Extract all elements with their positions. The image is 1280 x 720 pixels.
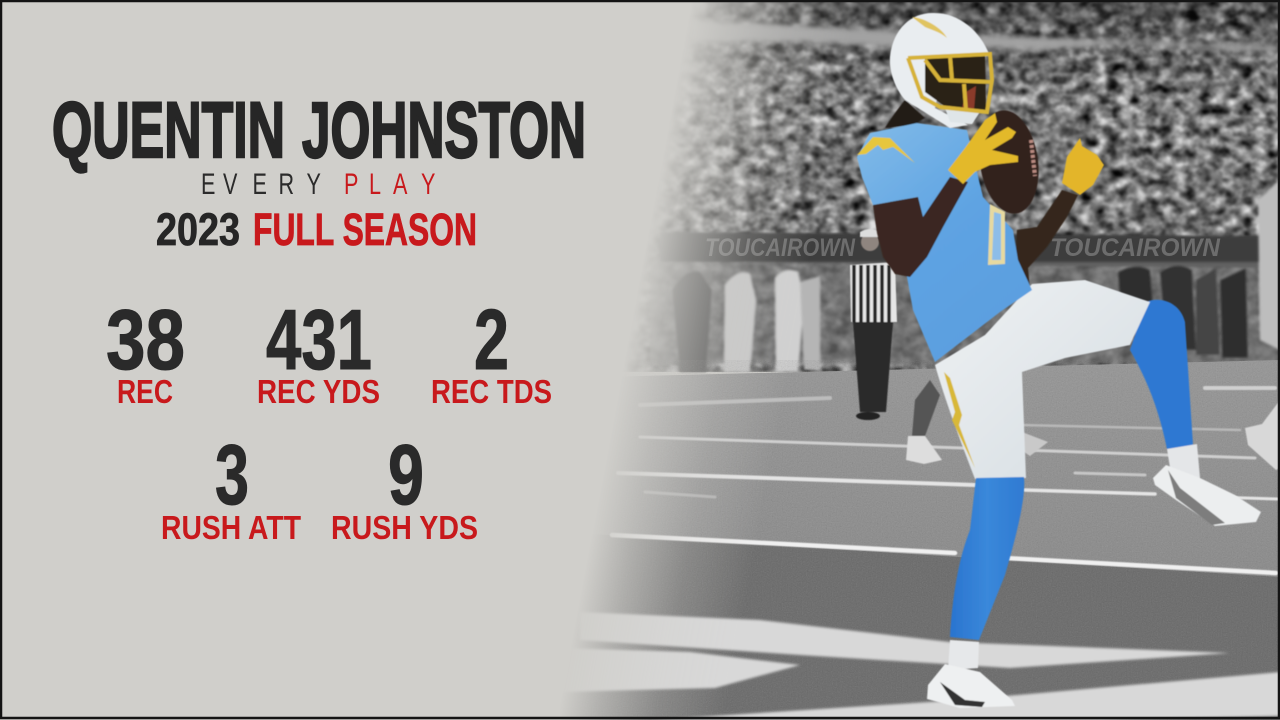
sideline people: [650, 180, 1280, 372]
field upper: [560, 360, 1280, 580]
stadium photo background: [560, 0, 1280, 720]
title: QUENTIN: [52, 85, 285, 174]
stat: receiving touchdowns: REC TDS: [431, 373, 552, 410]
background player leg: [906, 380, 1280, 470]
stat: receiving yards: REC YDS: [257, 373, 380, 410]
chin cup: [945, 108, 980, 124]
field lower end zone: [560, 532, 1280, 720]
stat: receptions: 38: [106, 293, 185, 388]
stat: rush yards: 9: [388, 428, 424, 523]
hair: [885, 100, 925, 128]
end zone white markings: [560, 612, 1280, 720]
facemask: [908, 54, 992, 112]
pants: [935, 280, 1150, 479]
player cutout: [857, 13, 1261, 708]
stat: rush attempts: RUSH ATT: [161, 509, 301, 546]
subtitle: every play: PLAY: [344, 166, 435, 201]
jersey number: [988, 204, 1005, 265]
stat: receptions: REC: [117, 373, 173, 410]
sideline banner: TOUCAIROWN: [705, 234, 856, 262]
raised sock: [1167, 444, 1200, 480]
stat: rush attempts: [161, 428, 301, 546]
face: [925, 56, 986, 110]
jersey shoulder bolt: [857, 137, 915, 163]
referee: [850, 229, 897, 420]
standing cleat: [927, 664, 1015, 708]
stat: receiving yards: [257, 293, 380, 410]
stadium wall: [690, 20, 1280, 52]
stat: rush yards: RUSH YDS: [331, 509, 478, 546]
lower leg sleeve: [950, 477, 1024, 640]
near arm: [873, 177, 968, 277]
icon: raised lower leg sleeve: [1130, 300, 1193, 449]
pants thigh lightning: [944, 372, 975, 468]
subtitle: every play: [201, 166, 435, 201]
title: JOHNSTON: [302, 85, 586, 174]
title: [52, 85, 586, 174]
sideline banner: TOUCAIROWN: [1050, 234, 1221, 262]
near glove: [948, 113, 1018, 184]
jersey: [857, 123, 1032, 362]
standing sock: [948, 640, 979, 670]
sideline banner: [660, 232, 1280, 268]
stat: receiving touchdowns: [431, 293, 552, 410]
stat: rush yards: [331, 428, 478, 546]
icon: far arm: [1014, 190, 1078, 290]
crowd stands: [630, 2, 1278, 372]
subtitle: every play: EVERY: [201, 166, 321, 201]
stat: receiving yards: 431: [266, 293, 372, 388]
yard lines: [612, 388, 1278, 573]
stat: receiving touchdowns: 2: [474, 293, 509, 388]
season heading: FULL SEASON: [253, 204, 477, 255]
season heading: 2023: [156, 204, 240, 255]
icon: football: [973, 106, 1045, 218]
raised cleat: [1153, 465, 1261, 526]
season heading: [156, 204, 477, 255]
far glove: [1062, 138, 1104, 195]
stat: rush attempts: 3: [215, 428, 249, 523]
helmet: [890, 13, 992, 128]
